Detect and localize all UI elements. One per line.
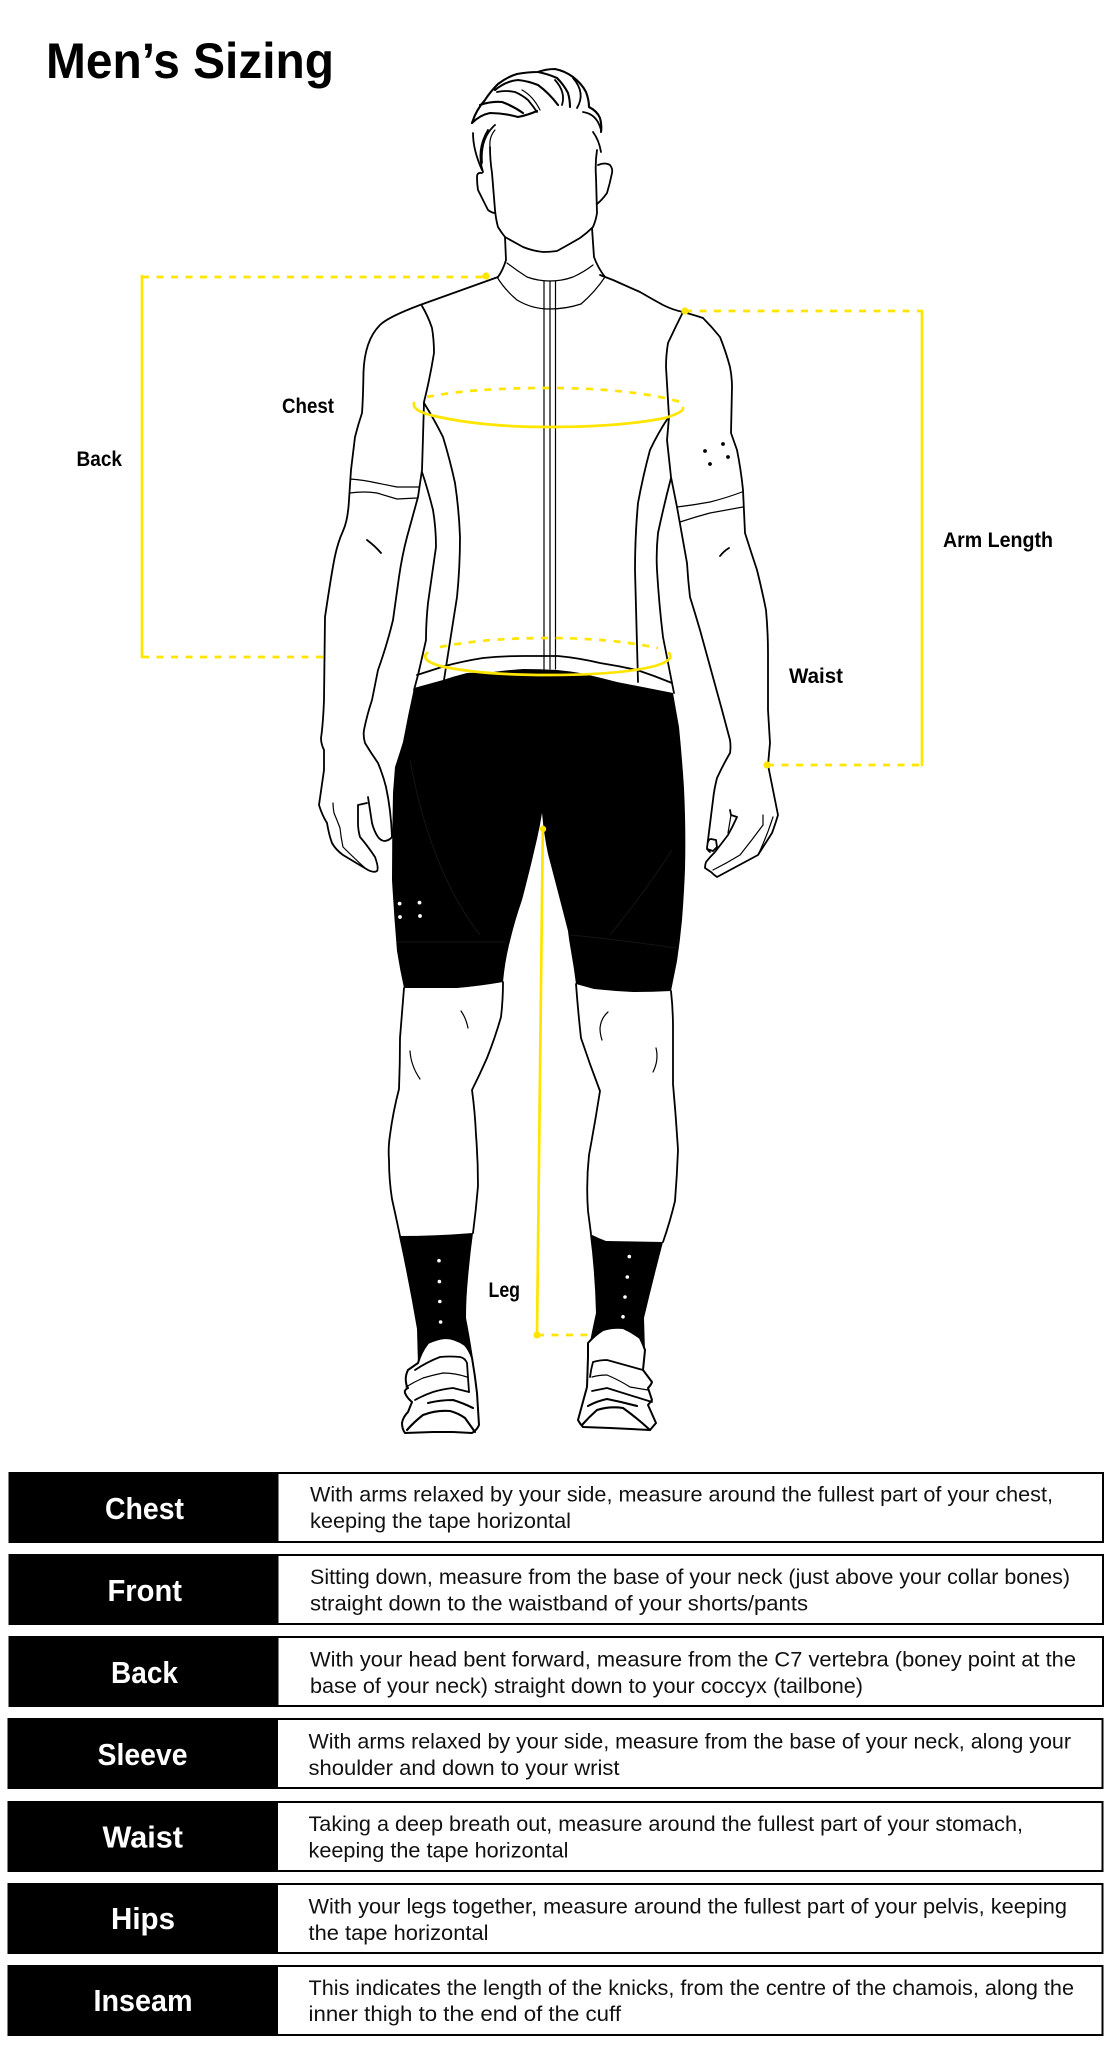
row: hips: Hips xyxy=(111,1901,175,1936)
label: waist: Waist xyxy=(789,665,843,688)
row: sleeve: Sleeve xyxy=(98,1737,188,1772)
measure: arm length bracket xyxy=(681,307,922,769)
hair xyxy=(472,69,601,172)
measure: chest loop xyxy=(414,388,683,427)
title: Men’s Sizing xyxy=(46,33,334,89)
row: hips: the tape horizontal xyxy=(308,1922,488,1945)
row: back: With your head bent forward, measure from the C7 vertebra (boney point at the xyxy=(310,1648,1076,1672)
row: hips xyxy=(8,1884,1102,1954)
face and ears xyxy=(477,147,612,252)
figure: cyclist line drawing xyxy=(319,69,778,1433)
left arm and hand xyxy=(319,277,498,872)
label: back: Back xyxy=(76,448,122,471)
sleeve dots xyxy=(703,442,730,466)
row: inseam: This indicates the length of the knicks, from the centre of the chamois, along the xyxy=(308,1977,1074,2000)
row: waist: Taking a deep breath out, measure around the fullest part of your stomach, xyxy=(308,1813,1023,1836)
row: chest xyxy=(8,1472,1103,1542)
row: back xyxy=(8,1636,1103,1706)
row: waist: Waist xyxy=(102,1820,183,1854)
row: front xyxy=(8,1554,1103,1624)
right shoe xyxy=(578,1328,656,1430)
row: sleeve xyxy=(8,1718,1102,1788)
row: waist xyxy=(8,1802,1102,1872)
label: leg: Leg xyxy=(488,1279,520,1302)
row: hips: With your legs together, measure around the fullest part of your pelvis, keeping xyxy=(308,1896,1067,1918)
row: inseam xyxy=(8,1966,1102,2036)
row: back: base of your neck) straight down to your coccyx (tailbone) xyxy=(310,1675,863,1698)
row: sleeve: shoulder and down to your wrist xyxy=(308,1757,620,1780)
row: front: straight down to the waistband of your shorts/pants xyxy=(310,1592,808,1616)
left sock xyxy=(399,1233,474,1365)
neck and collar xyxy=(497,228,605,309)
row: front: Front xyxy=(108,1573,182,1608)
row: inseam: inner thigh to the end of the cuff xyxy=(308,2003,621,2026)
row: chest: keeping the tape horizontal xyxy=(310,1510,571,1533)
row: chest: Chest xyxy=(105,1491,184,1526)
label: arm length: Arm Length xyxy=(943,529,1053,552)
torso panels xyxy=(414,403,674,693)
row: front: Sitting down, measure from the base of your neck (just above your collar bones) xyxy=(310,1566,1070,1589)
row: chest: With arms relaxed by your side, measure around the fullest part of your chest, xyxy=(310,1484,1053,1506)
measure: waist loop xyxy=(425,638,670,675)
row: sleeve: With arms relaxed by your side, measure from the base of your neck, along your xyxy=(308,1730,1071,1754)
row: inseam: Inseam xyxy=(94,1983,192,2018)
right leg xyxy=(576,984,678,1242)
label: chest: Chest xyxy=(282,395,334,418)
right arm and hand xyxy=(600,275,778,877)
measure: back bracket xyxy=(142,272,490,657)
right sock xyxy=(588,1234,663,1352)
left shoe xyxy=(402,1338,479,1433)
left leg xyxy=(389,982,503,1236)
zip xyxy=(544,281,556,669)
row: waist: keeping the tape horizontal xyxy=(308,1840,568,1862)
shorts xyxy=(392,669,685,992)
row: back: Back xyxy=(111,1655,179,1690)
measure: inseam line xyxy=(533,826,587,1339)
